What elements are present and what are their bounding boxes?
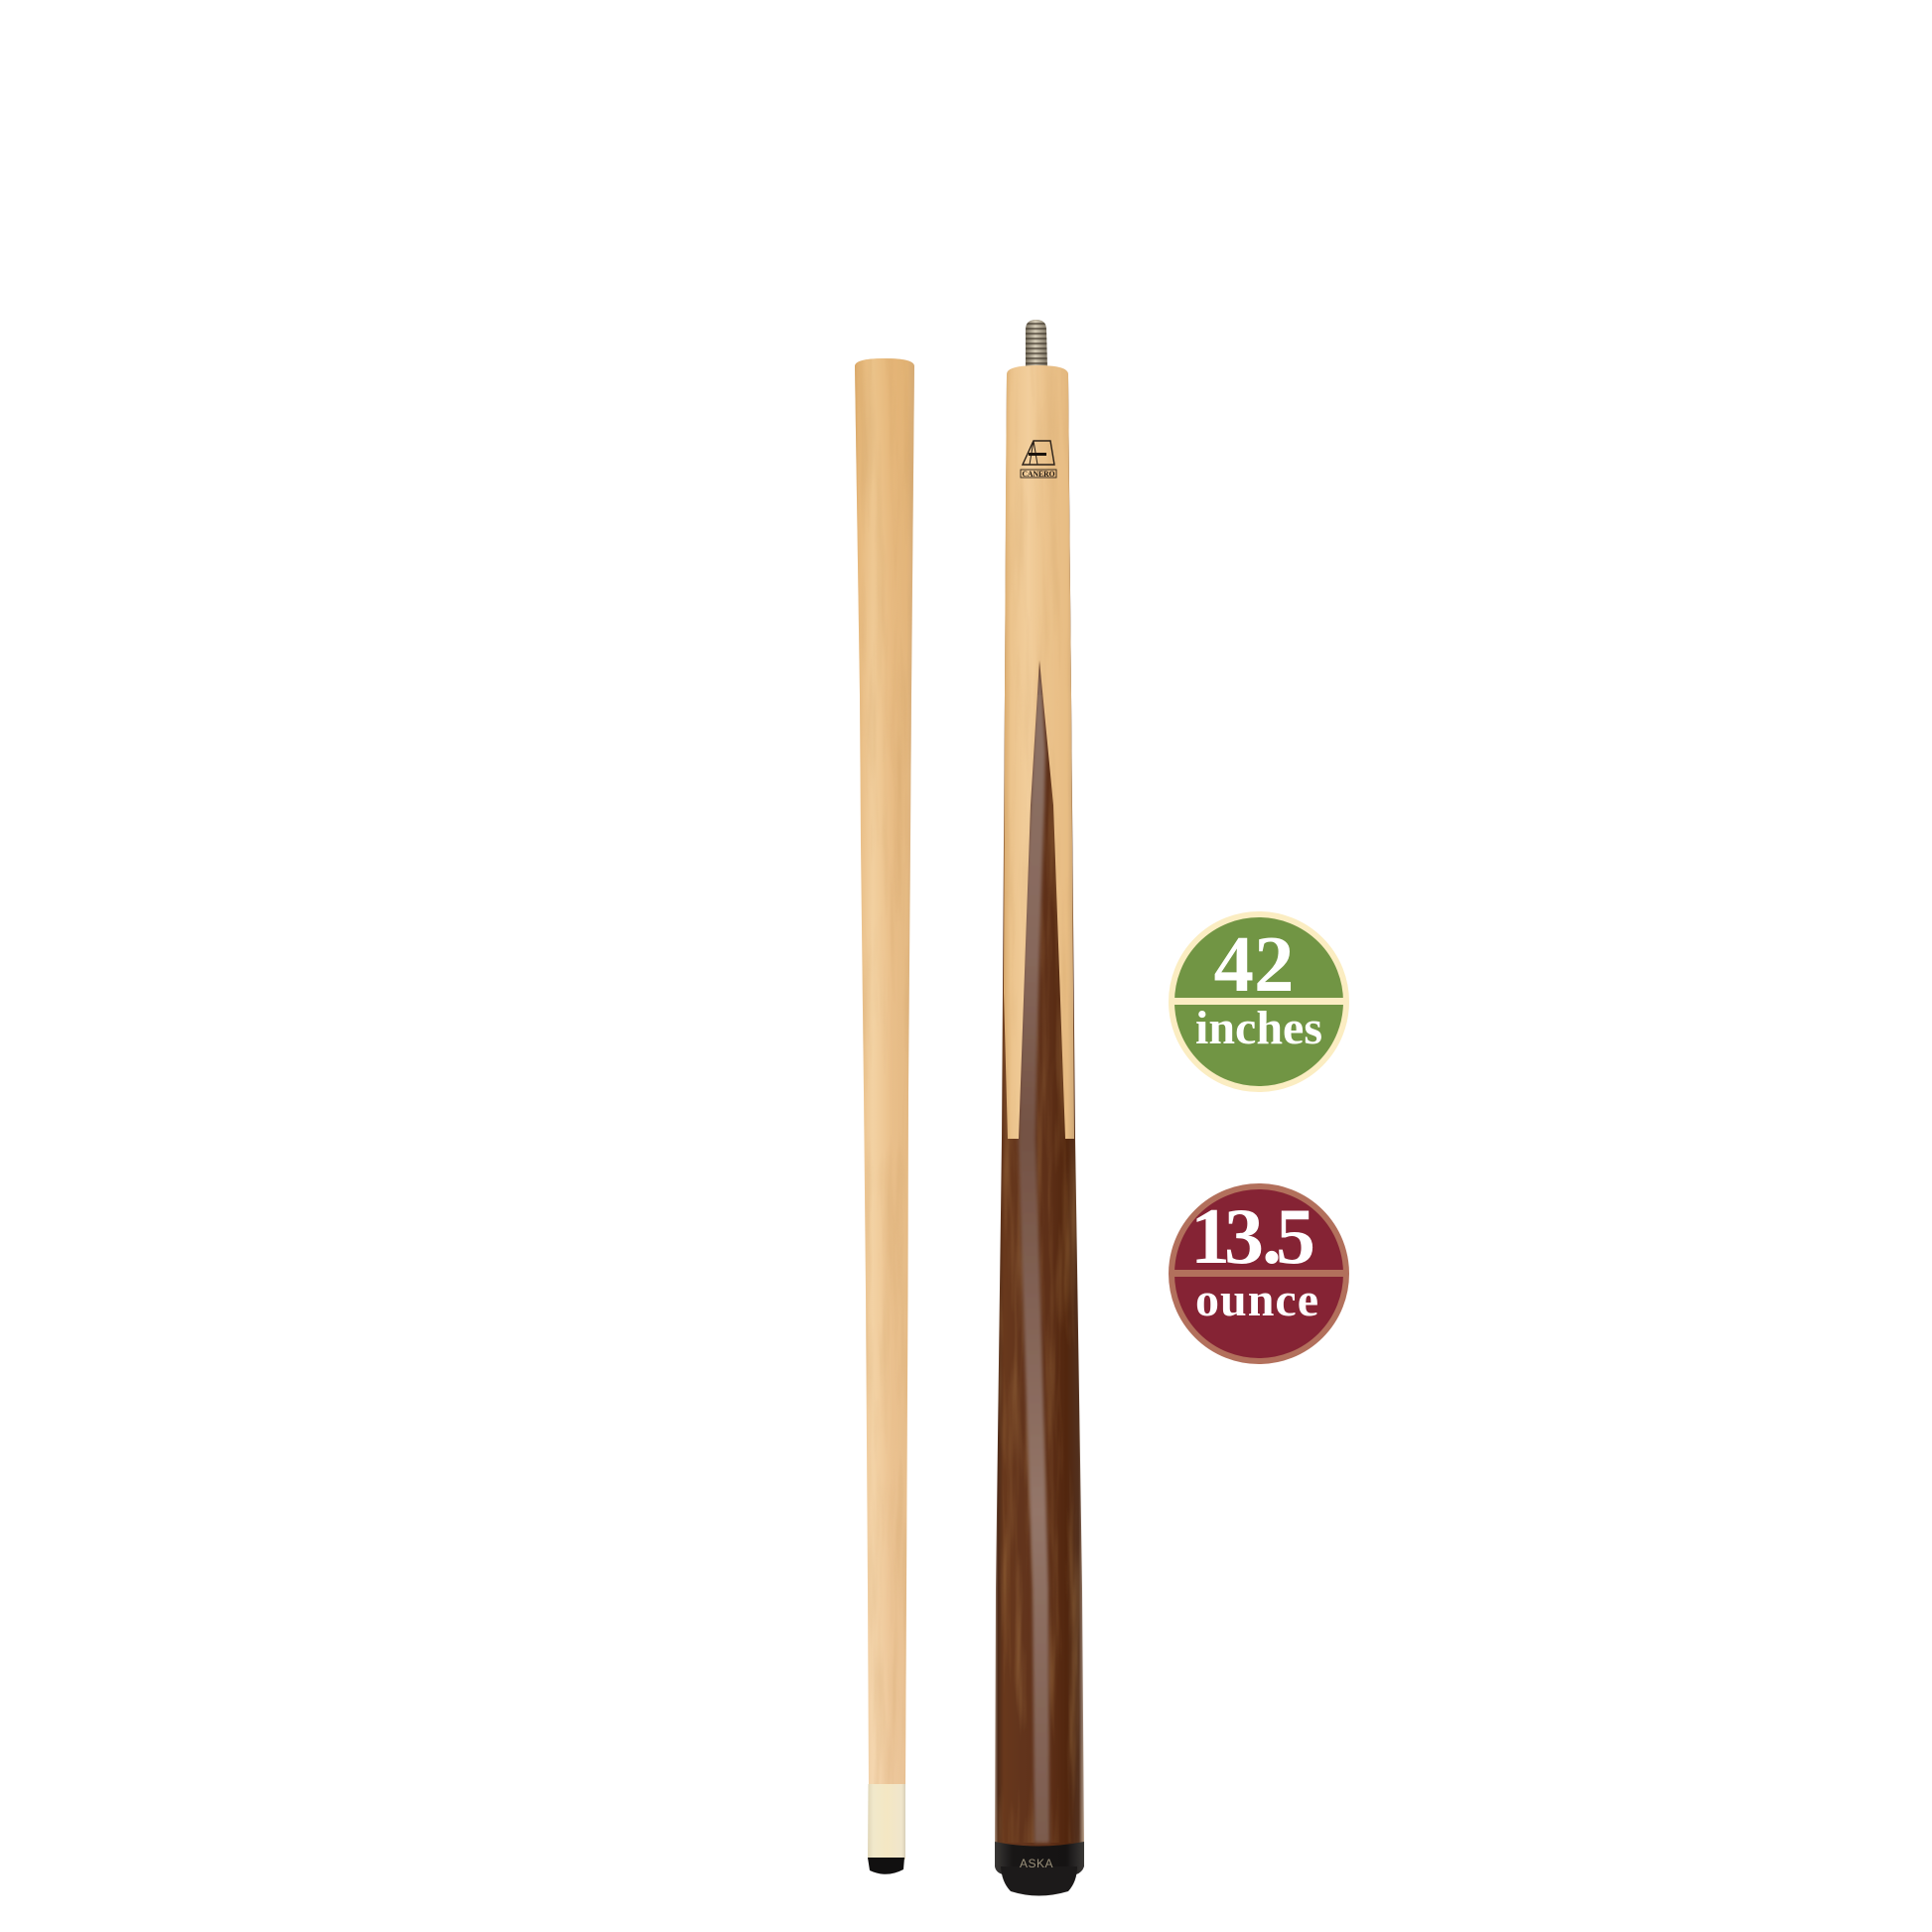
- brand text: ASKA: [1020, 1857, 1053, 1870]
- shaft wood body: [855, 358, 914, 1787]
- black cue tip: [868, 1858, 904, 1874]
- maple wood grain: [1004, 365, 1074, 1139]
- black butt sleeve: [995, 1842, 1084, 1874]
- badge divider: [1172, 998, 1346, 1005]
- ferrule: [868, 1784, 905, 1860]
- badge: length 42 inches: [1172, 914, 1346, 1089]
- point grey highlight band: [1019, 660, 1049, 1843]
- logo: [1021, 441, 1056, 479]
- left cue shaft: [855, 358, 914, 1874]
- maple forearm with spliced point: [1004, 365, 1074, 1139]
- brown wood grain: [995, 695, 1084, 1843]
- shaft wood grain: [855, 358, 914, 1787]
- threaded joint pin: [1026, 320, 1047, 369]
- badge divider: [1172, 1270, 1346, 1277]
- right cue butt: [995, 320, 1084, 1896]
- brown butt silhouette: [995, 377, 1084, 1847]
- shaft colour tone: [855, 358, 914, 1787]
- weight number: 13.5: [1190, 1193, 1315, 1281]
- weight unit: ounce: [1195, 1274, 1318, 1326]
- badge: weight 13.5 ounce: [1172, 1186, 1346, 1361]
- rubber bumper: [1001, 1866, 1077, 1896]
- logo: CANERO: [1023, 470, 1054, 479]
- length unit: inches: [1195, 1002, 1322, 1054]
- length number: 42: [1213, 919, 1295, 1009]
